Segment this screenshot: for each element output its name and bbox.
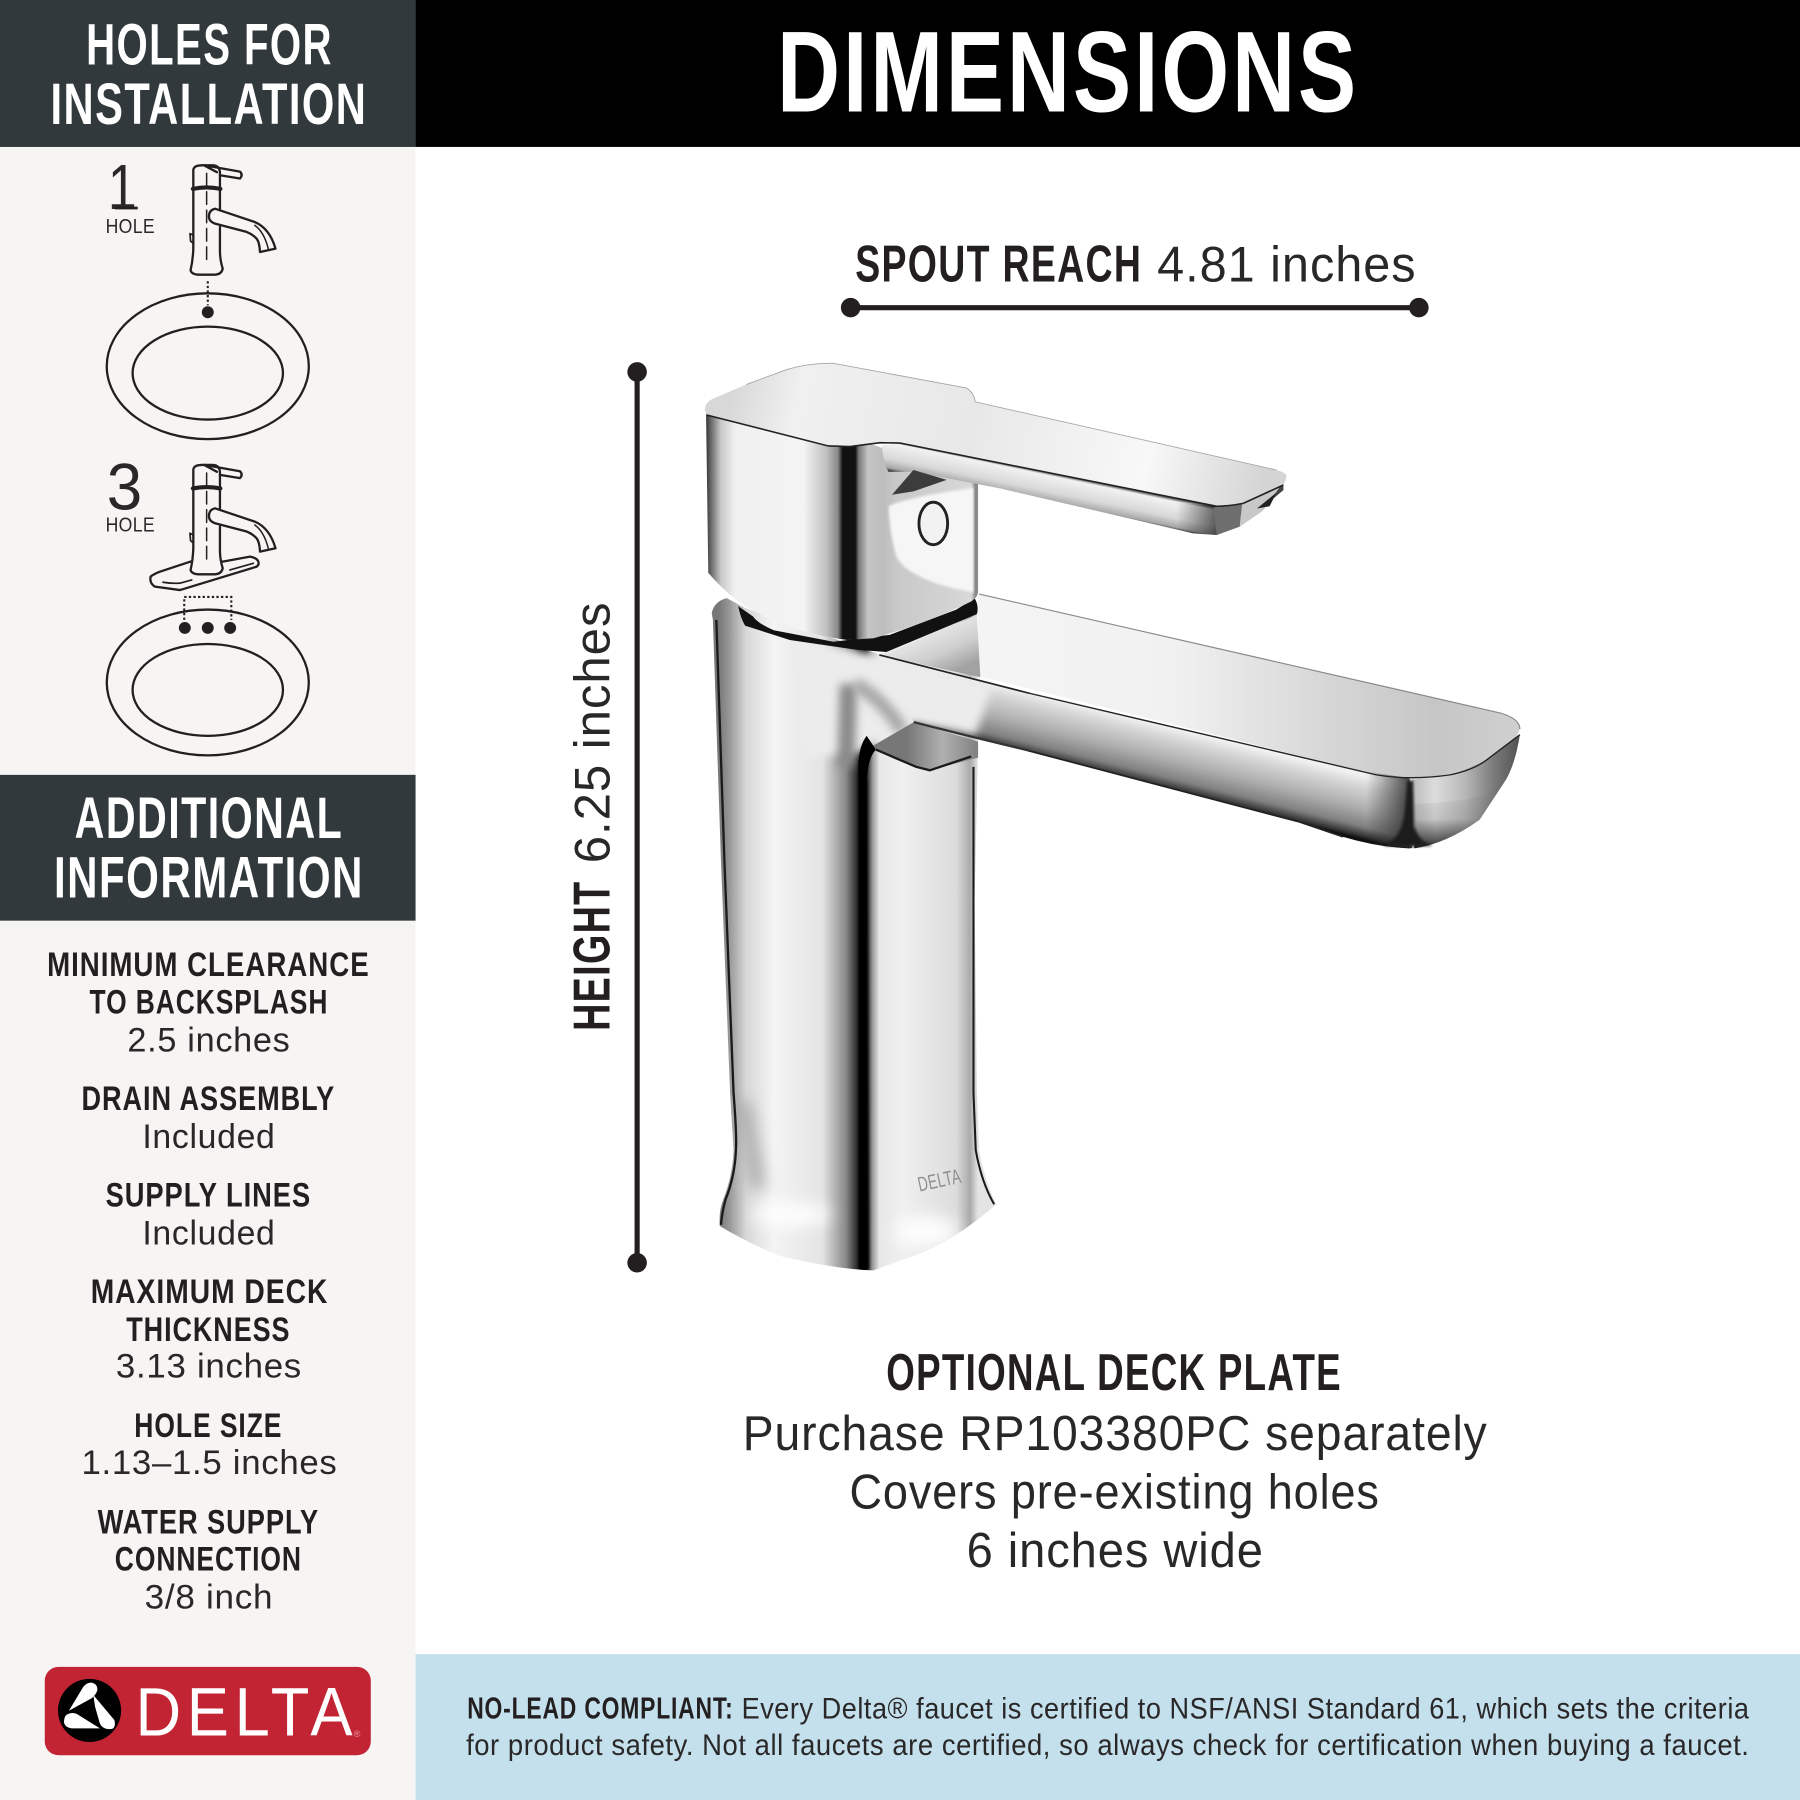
spec: water supply connection [98, 1504, 319, 1616]
deck plate [150, 557, 259, 590]
spout front face [882, 655, 1520, 848]
faucet line drawing [190, 165, 276, 275]
sink with three holes [107, 597, 309, 755]
spout reach dimension: SPOUT REACH [855, 234, 1142, 292]
lever end reflection [1177, 482, 1283, 535]
handle top edge lines [707, 363, 1283, 506]
spout underside junction [858, 722, 1030, 900]
height dimension: HEIGHT [563, 880, 621, 1031]
optional deck plate note: 6 inches wide [967, 1523, 1264, 1578]
sidebar heading: holes for installation: HOLES FOR [86, 12, 333, 77]
spec: minimum clearance [47, 946, 370, 1060]
label: 3 hole: HOLE [106, 514, 155, 537]
icon: three hole faucet with deck plate and sink [106, 451, 309, 755]
lever front face [882, 443, 1283, 535]
label: 1 hole [106, 151, 155, 238]
sidebar heading: holes for installation [0, 0, 416, 147]
sidebar heading: additional information: ADDITIONAL [75, 786, 343, 851]
spec: maximum deck thickness: 3.13 inches [116, 1348, 302, 1386]
faucet line drawing [190, 465, 276, 574]
spec: drain assembly: DRAIN ASSEMBLY [82, 1080, 335, 1118]
sidebar heading: holes for installation: INSTALLATION [51, 72, 367, 137]
spout top edge [979, 594, 1520, 729]
panel: left sidebar [0, 0, 416, 1800]
panel: no-lead compliance note: NO-LEAD COMPLIANT: [467, 1691, 734, 1725]
label: 3 hole: 3 [107, 451, 143, 524]
label: 3 hole [106, 451, 155, 537]
spec: minimum clearance: 2.5 inches [127, 1022, 290, 1060]
spec: drain assembly [82, 1080, 335, 1156]
spec: minimum clearance: TO BACKSPLASH [90, 984, 328, 1022]
spout to body joint [879, 615, 1030, 693]
sidebar heading: additional information: INFORMATION [54, 846, 364, 911]
spec: supply lines: SUPPLY LINES [106, 1177, 311, 1215]
height dimension [563, 362, 647, 1273]
spec: hole size [82, 1407, 338, 1482]
spec: maximum deck thickness: THICKNESS [126, 1311, 290, 1349]
handle shadow detail [892, 470, 947, 495]
engraved logo: DELTA [916, 1165, 963, 1196]
faucet body [712, 598, 996, 1270]
logo: delta [45, 1667, 371, 1755]
panel: no-lead compliance note: for product safety. Not all faucets are certified, so always check for certification when buying a faucet. [466, 1730, 1749, 1762]
title: dimensions [416, 0, 1800, 147]
spec: supply lines [106, 1177, 311, 1252]
height dimension: 6.25 inches [564, 602, 621, 863]
sink with one hole [107, 281, 309, 439]
spec: drain assembly: Included [142, 1118, 276, 1156]
spec: minimum clearance: MINIMUM CLEARANCE [47, 946, 370, 984]
spec: maximum deck thickness: MAXIMUM DECK [91, 1273, 328, 1311]
optional deck plate note: OPTIONAL DECK PLATE [886, 1343, 1342, 1401]
label: 1 hole: 1 [108, 151, 138, 223]
label: 1 hole: HOLE [106, 215, 155, 238]
title: dimensions: DIMENSIONS [777, 8, 1359, 136]
logo: delta: ® [354, 1729, 361, 1739]
optional deck plate note: Covers pre-existing holes [849, 1464, 1380, 1519]
spec: supply lines: Included [142, 1214, 276, 1252]
optional deck plate note: Purchase RP103380PC separately [743, 1406, 1488, 1461]
logo: delta: DELTA [135, 1674, 358, 1751]
handle reflections [889, 476, 979, 598]
spout reach dimension: 4.81 inches [1157, 235, 1417, 292]
product image: chrome faucet [705, 363, 1520, 1270]
seam ring [738, 598, 978, 652]
spout top face [978, 593, 1520, 778]
spec: hole size: HOLE SIZE [134, 1407, 282, 1445]
panel: no-lead compliance note: Every Delta® faucet is certified to NSF/ANSI Standard 61, which sets the criteria [742, 1693, 1750, 1725]
spec: water supply connection: CONNECTION [115, 1540, 302, 1578]
handle button [919, 502, 948, 545]
spec: hole size: 1.13–1.5 inches [82, 1444, 338, 1482]
soft body shading [743, 638, 993, 1270]
handle body [706, 409, 978, 640]
spec: water supply connection: 3/8 inch [145, 1578, 273, 1616]
spec: water supply connection: WATER SUPPLY [98, 1504, 319, 1542]
panel: no-lead compliance note [416, 1654, 1800, 1800]
handle top face [705, 363, 1287, 506]
body edge reflections [716, 620, 994, 1225]
spout reach dimension [841, 234, 1429, 317]
sidebar heading: additional information [0, 775, 416, 921]
spec: maximum deck thickness [91, 1273, 328, 1386]
spout tip face [1029, 693, 1520, 848]
optional deck plate note [743, 1343, 1488, 1578]
icon: one hole faucet and sink [106, 151, 309, 439]
